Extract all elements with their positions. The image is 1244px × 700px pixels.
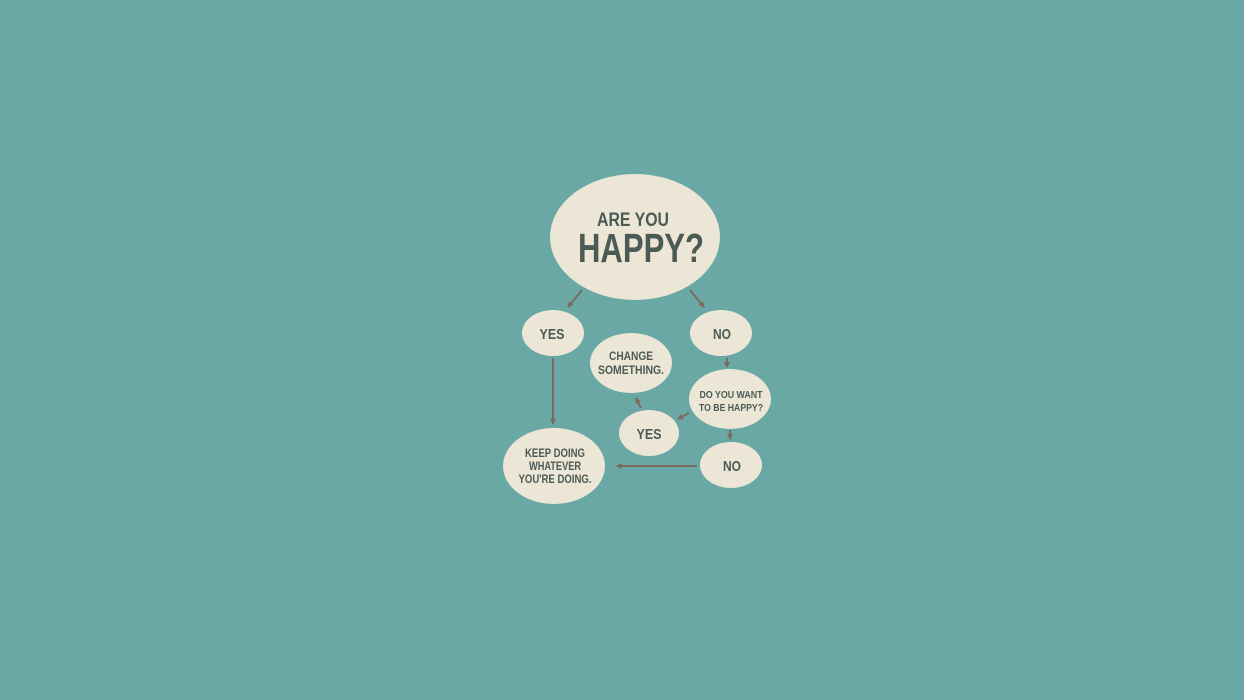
node: no 2	[700, 442, 762, 488]
node: keep doing	[503, 428, 605, 504]
node: no	[690, 310, 752, 356]
node: are you happy: HAPPY?	[578, 225, 704, 271]
node: keep doing: YOU'RE DOING.	[518, 474, 592, 486]
node: are you happy: ARE YOU	[597, 210, 669, 231]
node: do you want to be happy: DO YOU WANT	[700, 389, 763, 401]
node: keep doing: KEEP DOING	[525, 448, 585, 460]
node: yes 2	[619, 410, 679, 456]
node: do you want to be happy	[689, 369, 771, 429]
node: do you want to be happy: TO BE HAPPY?	[699, 402, 763, 414]
node: change something: CHANGE	[609, 349, 653, 363]
node: no 2: NO	[723, 458, 741, 475]
node: change something	[590, 333, 672, 393]
node: yes	[522, 310, 584, 356]
node: are you happy	[550, 174, 720, 300]
node: no: NO	[713, 326, 731, 343]
node: yes: YES	[540, 326, 564, 343]
node: yes 2: YES	[636, 426, 662, 443]
arrows	[553, 290, 730, 466]
node: change something: SOMETHING.	[598, 363, 664, 377]
node: keep doing: WHATEVER	[529, 461, 582, 473]
